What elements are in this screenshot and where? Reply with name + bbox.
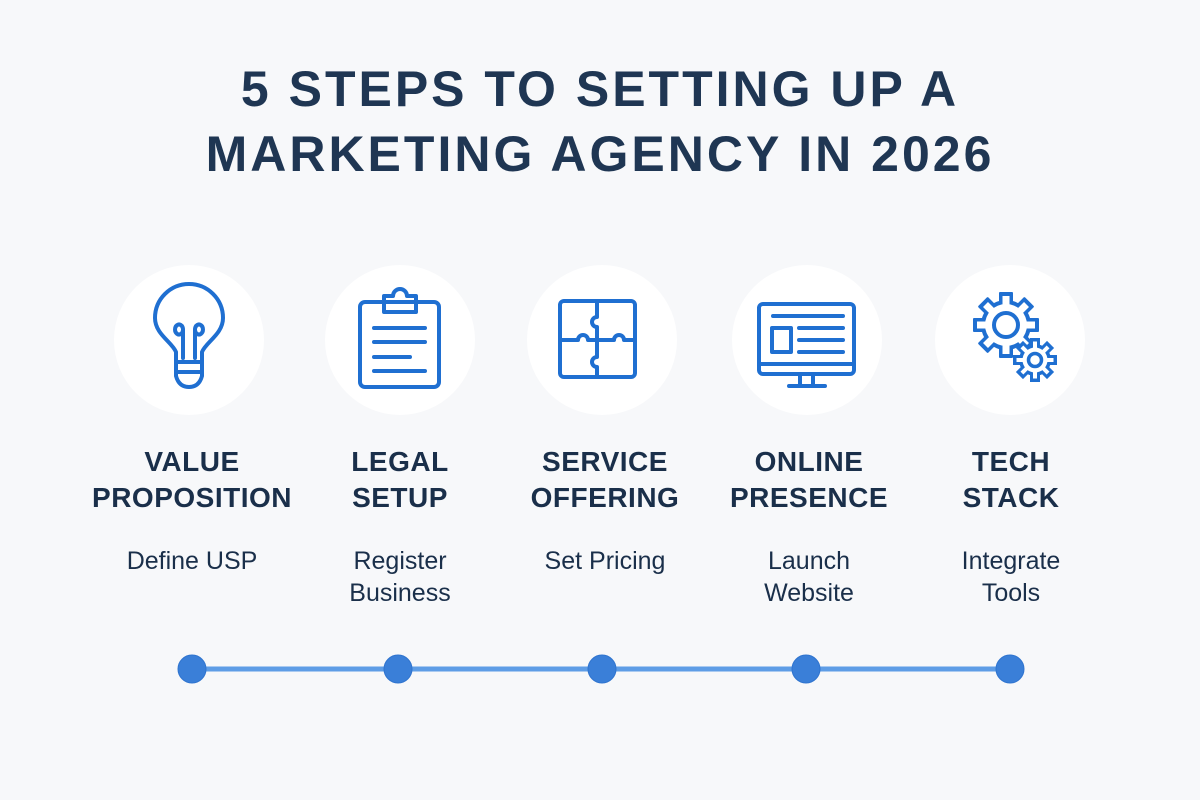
timeline — [178, 655, 1024, 683]
step 2 text: Business — [349, 579, 451, 607]
step 2 text — [349, 446, 451, 607]
step 4 text: ONLINE — [755, 446, 863, 477]
step 5 text: TECH — [972, 446, 1050, 477]
step 3 text: Set Pricing — [545, 547, 665, 575]
step 3 text: SERVICE — [542, 446, 668, 477]
step 4 text: Website — [764, 579, 854, 607]
step 4 text: Launch — [768, 547, 850, 575]
step 5 text: STACK — [963, 482, 1059, 513]
step 3 text: OFFERING — [531, 482, 679, 513]
step 2 text: LEGAL — [351, 446, 449, 477]
icon: monitor — [759, 304, 854, 386]
step 5 text — [962, 446, 1060, 607]
icon: light bulb — [155, 284, 223, 387]
title: MARKETING AGENCY IN 2026 — [206, 126, 994, 182]
step 4 text — [730, 446, 888, 607]
step 1 text: Define USP — [127, 547, 257, 575]
step 2 text: Register — [353, 547, 447, 575]
step 2 text: SETUP — [352, 482, 448, 513]
icon: puzzle — [560, 301, 635, 377]
icon: gears — [973, 292, 1057, 382]
step 4 text: PRESENCE — [730, 482, 888, 513]
step 3 text — [531, 446, 679, 575]
step 1 text: PROPOSITION — [92, 482, 292, 513]
step 1 text — [92, 446, 292, 575]
step 5 text: Tools — [982, 579, 1040, 607]
title: 5 STEPS TO SETTING UP A — [241, 61, 959, 117]
icon: clipboard — [360, 289, 439, 387]
title — [206, 61, 994, 182]
step 1 text: VALUE — [144, 446, 240, 477]
step 5 text: Integrate — [962, 547, 1060, 575]
